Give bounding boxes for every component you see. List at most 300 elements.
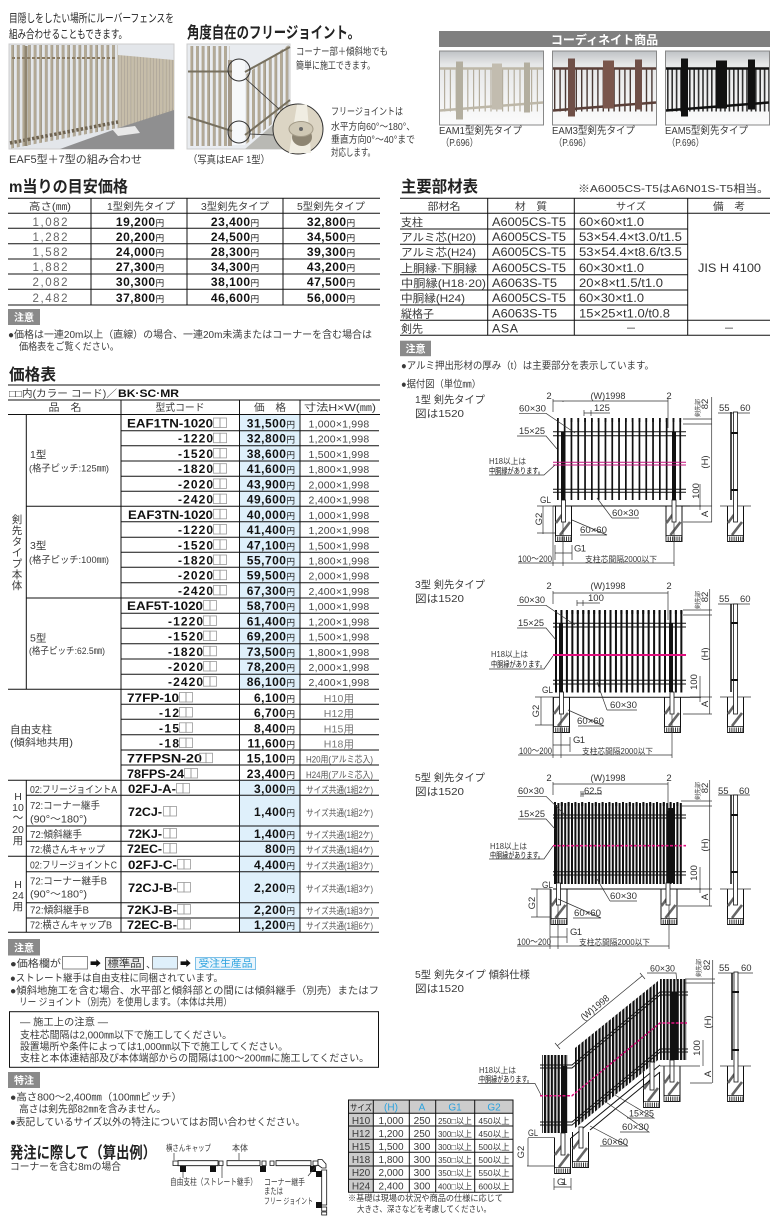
column: model codes	[127, 416, 226, 932]
table: foundation sizes: 2,000	[378, 1168, 404, 1179]
labels: type 5 dimensions: A	[700, 893, 711, 900]
labels: type 3 dimensions: G2	[531, 705, 542, 717]
table: materials: 中胴縁(H18·20)	[401, 276, 486, 290]
labels: type 1 dimensions: 2	[546, 391, 552, 402]
column: model codes: 72KJ-	[128, 827, 162, 841]
table: materials: －	[724, 323, 734, 335]
text: colour code: □□内(カラー コード)／	[9, 387, 117, 400]
table: price per metre	[8, 198, 380, 305]
labels: diagram: 自由支柱（ストレート継手）	[170, 1176, 257, 1187]
column: model codes: 78FPS-24	[127, 767, 184, 781]
labels: type 1 dimensions: 支柱芯間隔2000以下	[585, 554, 657, 564]
column: model codes: 77FP-10	[127, 691, 179, 705]
heading: louver fence combination: 目隠しをしたい場所にルーバーフェンスを	[9, 11, 174, 25]
column: dimensions: 1,800×1,998	[309, 647, 369, 659]
labels: type 1 dimensions: G1	[574, 544, 586, 554]
labels: sloped dimensions: 60	[741, 963, 752, 974]
column: model codes: -12	[159, 706, 179, 720]
labels: type 1 dimensions: 2	[666, 391, 672, 402]
label: type 3 title: 図は1520	[415, 593, 464, 605]
column: prices: 49,600円	[247, 493, 295, 507]
labels: sloped dimensions: A	[703, 1070, 714, 1077]
labels: type 1 dimensions	[489, 391, 751, 565]
column: prices: 6,700円	[254, 706, 295, 720]
label: H10-20: ～	[13, 812, 24, 824]
labels: type 3 dimensions	[491, 581, 751, 757]
labels: type 5 dimensions	[490, 773, 750, 948]
badge: special order	[8, 1072, 40, 1088]
table: price per metre: 1型剣先タイプ	[107, 200, 175, 213]
labels: sloped dimensions: GL	[528, 1128, 538, 1139]
table: foundation sizes: 300	[414, 1142, 431, 1153]
photo: free joint corner	[187, 44, 290, 149]
text: material equivalence note: ※A6005CS-T5はA6N01S-T5相当。	[578, 182, 769, 195]
labels: type 1 dimensions: 60×60	[580, 525, 607, 536]
labels: type 3 dimensions: 100	[689, 674, 700, 690]
labels: sloped dimensions: 55	[719, 963, 730, 974]
label: type 5: (格子ピッチ:62.5㎜)	[29, 645, 105, 657]
labels: sloped dimensions: 60×30	[650, 964, 675, 974]
column: model codes: 72CJ-	[128, 805, 162, 819]
table: foundation sizes	[348, 1100, 513, 1192]
table: price per metre: 1,882	[32, 262, 68, 274]
label: sword tip body: タ	[12, 536, 22, 548]
column: prices: 41,600円	[247, 462, 295, 476]
table: materials: A6005CS-T5	[492, 291, 566, 305]
badge: special order: 特注	[14, 1074, 34, 1087]
column: prices: 43,900円	[247, 477, 295, 491]
table: materials	[400, 198, 770, 336]
label: type 3 title: 3型 剣先タイプ	[415, 578, 485, 591]
legend: price column colours: 、	[146, 960, 156, 971]
table: foundation sizes: 400□以上	[438, 1182, 472, 1192]
labels: accessories: 72:傾斜継手	[30, 828, 82, 841]
labels: type 1 dimensions: 82	[700, 399, 711, 409]
table: foundation sizes: H15	[352, 1142, 371, 1153]
text: foundation note	[348, 1193, 503, 1214]
column: model codes: -2020	[178, 569, 213, 583]
column: model codes: -1220	[168, 614, 203, 628]
labels: type 3 dimensions: GL	[542, 685, 553, 696]
legend: price column colours: ➡	[180, 958, 191, 970]
column: prices: 38,600円	[247, 447, 295, 461]
labels: type 5 dimensions: (W)1998	[590, 773, 626, 784]
label: type 5 title: 5型 剣先タイプ	[415, 771, 485, 784]
table: price per metre: 1,082	[32, 217, 68, 229]
label: type 3: (格子ピッチ:100㎜)	[29, 554, 109, 566]
table: price per metre: 5型剣先タイプ	[297, 200, 365, 213]
column: prices: 86,100円	[247, 675, 295, 689]
column: dimensions: 1,500×1,998	[309, 449, 369, 461]
labels: type 3 dimensions: 2	[546, 581, 552, 592]
table: foundation sizes: G1	[448, 1102, 462, 1114]
column: prices: 32,800円	[247, 432, 295, 446]
table: price per metre: 高さ(㎜)	[29, 200, 71, 213]
side view: type 1	[718, 412, 751, 522]
legend: price column colours: 標準品	[108, 957, 142, 970]
table: foundation sizes: A	[419, 1102, 426, 1114]
heading: ordering example: 発注に際して（算出例）	[10, 1143, 156, 1162]
column: model codes: -1520	[178, 538, 213, 552]
labels: type 3 dimensions: A	[700, 700, 711, 707]
caption: EAM1: EAM1型剣先タイプ	[439, 124, 522, 137]
column: dimensions: 1,500×1,998	[309, 632, 369, 644]
column: dimensions: H15用	[324, 723, 354, 735]
labels: type 5 dimensions: 剣先部	[694, 782, 702, 800]
table: materials: 53×54.4×t8.6/t3.5	[579, 245, 682, 259]
table header	[48, 401, 376, 414]
column: dimensions: 2,400×1,998	[309, 586, 369, 598]
table: foundation sizes: 300	[414, 1168, 431, 1179]
labels: type 5 dimensions: 100	[689, 865, 700, 881]
labels: type 1 dimensions: H18以上は	[489, 457, 526, 466]
labels: sloped dimensions: G1	[557, 1177, 567, 1188]
table: foundation sizes: 450以上	[478, 1129, 510, 1139]
column: model codes: -1820	[178, 462, 213, 476]
column: model codes: EAF3TN-1020	[128, 508, 213, 522]
column: prices: 73,500円	[247, 645, 295, 659]
side view: type 5	[718, 795, 751, 905]
table: foundation sizes: (H)	[384, 1102, 398, 1114]
column: model codes: -1220	[178, 523, 213, 537]
labels: type 3 dimensions: 中胴縁があります。	[491, 659, 546, 669]
labels: type 1 dimensions: GL	[540, 495, 551, 506]
legend: price column colours: 受注生産品	[198, 957, 252, 970]
text: price note	[8, 328, 372, 353]
table: price per metre: 24,000円	[116, 245, 164, 259]
labels: type 5 dimensions: 60×60	[574, 908, 601, 919]
column: dimensions: 1,000×1,998	[309, 418, 369, 430]
labels: type 5 dimensions: 2	[546, 773, 552, 784]
labels: type 3 dimensions: 60×30	[610, 700, 637, 711]
caption: EAF5 and 7: EAF5型＋7型の組み合わせ	[9, 152, 142, 166]
column: model codes: -2420	[178, 493, 213, 507]
label: free post: 自由支柱	[10, 723, 52, 736]
column: prices: 11,600円	[247, 737, 295, 751]
table: materials: アルミ芯(H24)	[401, 246, 476, 259]
table: foundation sizes: 300	[414, 1182, 431, 1192]
column: prices	[247, 416, 295, 932]
column: model codes: 02FJ-C-	[128, 858, 177, 872]
labels: type 5 dimensions: 60	[739, 786, 750, 797]
photo: EAF5 and 7 type fence	[9, 44, 174, 149]
table: price per metre: 2,082	[32, 277, 68, 289]
legend: price column colours	[10, 956, 256, 971]
label: sloped title	[415, 968, 530, 995]
labels: type 3 dimensions: 100～200	[519, 746, 552, 757]
table: materials: 材 質	[515, 200, 547, 213]
column: model codes: 72EC-	[127, 842, 162, 856]
column: model codes: -2020	[168, 660, 203, 674]
table: materials: A6005CS-T5	[492, 230, 566, 244]
table: foundation sizes: 600以上	[478, 1182, 510, 1192]
column: prices: 58,700円	[247, 599, 295, 613]
table: materials: －	[626, 323, 636, 335]
column: model codes: EAF1TN-1020	[127, 416, 213, 430]
labels: type 5 dimensions: G1	[570, 927, 582, 938]
table: price per metre: 34,500円	[307, 230, 355, 244]
labels: sloped dimensions: (W)1998	[579, 993, 612, 1023]
table: materials: 剣先	[401, 322, 423, 336]
photo: EAM3	[552, 51, 656, 125]
column: prices: 69,200円	[247, 630, 295, 644]
text: corner note: コーナー部＋傾斜地でも	[296, 45, 388, 58]
column: dimensions: H12用	[324, 708, 354, 720]
heading bar: coordinate products: コーディネイト商品	[551, 32, 658, 47]
column: model codes: -1520	[178, 447, 213, 461]
labels: type 1 dimensions: 60	[740, 403, 751, 414]
table: foundation sizes: 250	[414, 1129, 431, 1140]
text: notes: ●傾斜地施工を含む場合、水平部と傾斜部との間には傾斜継手（別売）またはフ	[10, 984, 379, 997]
labels: type 1 dimensions: 15×25	[519, 426, 545, 437]
column: dimensions: 1,800×1,998	[309, 556, 369, 568]
labels: type 1 dimensions: 剣先部	[694, 399, 702, 417]
labels: sloped dimensions: 82	[702, 960, 713, 970]
badge: notice right: 注意	[406, 342, 426, 356]
labels: type 5 dimensions: H18以上は	[490, 842, 527, 851]
table: materials: A6005CS-T5	[492, 261, 566, 275]
table: price per metre: 1,282	[32, 232, 68, 244]
labels: sloped dimensions: 中胴縁があります。	[479, 1074, 533, 1084]
column: dimensions: 1,000×1,998	[309, 601, 369, 613]
table: foundation sizes: 350□以上	[438, 1155, 472, 1165]
labels: accessories	[30, 785, 117, 932]
labels: type 5 dimensions: 2	[666, 773, 672, 784]
label: type 5 title: 図は1520	[415, 786, 464, 798]
labels: type 1 dimensions: 125	[594, 403, 610, 414]
label: sword tip body: 先	[12, 525, 22, 537]
caption: EAM1: （P.696）	[441, 137, 478, 149]
table: price per metre: 20,200円	[116, 230, 164, 244]
labels: diagram	[166, 1143, 313, 1206]
heading: louver fence combination: 組み合わせることもできます。	[9, 28, 127, 41]
table: materials: 20×8×t1.5/t1.0	[579, 276, 663, 290]
column: prices: 3,000円	[254, 782, 295, 796]
column: prices: 6,100円	[254, 691, 295, 705]
column: model codes: 72CJ-B-	[128, 881, 177, 895]
table: materials: ASA	[492, 322, 519, 336]
label: H10-20: 用	[13, 835, 23, 847]
labels: accessories: (90°～180°)	[30, 890, 87, 901]
table: foundation sizes: H24	[352, 1182, 371, 1192]
table: foundation sizes: H10	[352, 1116, 371, 1127]
drawing: type 1 fence	[415, 391, 751, 566]
table: foundation sizes: 300□以上	[438, 1142, 472, 1152]
caption: EAM5: （P.696）	[667, 137, 704, 149]
column: model codes: -2020	[178, 477, 213, 491]
side view: type 3	[718, 604, 751, 714]
labels: type 3 dimensions: 60	[740, 594, 751, 605]
table: price per metre: 34,300円	[211, 260, 259, 274]
caption: EAM3: （P.696）	[554, 137, 591, 149]
table: price per metre: 39,300円	[307, 245, 355, 259]
table: foundation sizes: 350□以上	[438, 1168, 472, 1178]
column: dimensions: 2,000×1,998	[309, 479, 369, 491]
table: materials: JIS H 4100	[698, 261, 761, 275]
table: materials: 60×30×t1.0	[579, 261, 644, 275]
labels: type 5 dimensions: G2	[527, 897, 538, 909]
column: dimensions: 1,200×1,998	[309, 525, 369, 537]
labels: type 1 dimensions: 55	[719, 403, 730, 414]
photo: EAM1	[440, 51, 544, 125]
table: materials: 縦格子	[401, 306, 434, 320]
callout: construction notes: ― 施工上の注意 ―	[20, 1016, 108, 1029]
caption: EAM3	[552, 124, 635, 149]
label: sword tip body: プ	[12, 558, 23, 570]
table: foundation sizes: サイズ	[350, 1102, 372, 1112]
text: notes: ●ストレート継手は自由支柱に同梱されています。	[10, 972, 223, 984]
side view: sloped	[718, 972, 753, 1082]
caption: EAM5	[665, 124, 748, 149]
label: type 5 title	[415, 771, 485, 798]
table header: 寸法H×W(㎜)	[304, 401, 376, 414]
text: special order notes: ●表記しているサイズ以外の特注についてはお問い合わせください。	[10, 1116, 305, 1129]
labels: type 5 dimensions: 82	[700, 783, 711, 793]
labels: type 3 dimensions: 15×25	[518, 618, 544, 629]
drawing: type 5 fence	[415, 771, 751, 949]
text: special order notes: ●高さ800～2,400㎜（100㎜ピッチ）	[10, 1091, 182, 1104]
labels: type 1 dimensions: 60×30	[519, 404, 546, 414]
text: free joint description	[331, 106, 415, 159]
column: model codes: 02FJ-A-	[128, 782, 176, 796]
heading: louver fence combination	[9, 11, 174, 41]
table: foundation sizes: 2,400	[378, 1182, 404, 1192]
column: prices: 41,400円	[247, 523, 295, 537]
column: dimensions: サイズ共通(1組3ケ)	[306, 905, 373, 916]
text: free joint description: 水平方向60°～180°、	[331, 120, 415, 133]
table: foundation sizes: 1,500	[378, 1142, 404, 1153]
table: foundation sizes: 500以上	[478, 1142, 510, 1152]
table: materials: A6063S-T5	[492, 306, 557, 320]
icon: joint magnifier circles	[228, 59, 279, 143]
table: materials: 上胴縁·下胴縁	[401, 261, 477, 275]
table: foundation sizes: 300□以上	[438, 1129, 472, 1139]
text: free joint description: フリージョイントは	[331, 106, 403, 118]
callout: construction notes: 設置場所や条件によっては1,000㎜以下で施工してください。	[20, 1040, 288, 1053]
column: prices: 15,100円	[247, 752, 295, 766]
table: foundation sizes: 550以上	[478, 1168, 510, 1178]
table header: 型式コード	[156, 401, 204, 414]
column: dimensions: サイズ共通(1組6ケ)	[306, 920, 373, 931]
table: foundation sizes: 500以上	[478, 1155, 510, 1165]
text: colour code: BK·SC·MR	[118, 388, 179, 400]
heading: ordering example	[10, 1143, 156, 1173]
labels: accessories: 72:コーナー継手B	[30, 874, 107, 887]
column: dimensions: H24用(アルミ芯入)	[306, 770, 373, 780]
labels: type 1 dimensions: 100	[691, 483, 702, 499]
table: price per metre: 1,582	[32, 247, 68, 259]
column: prices: 2,200円	[254, 881, 295, 895]
labels: type 3 dimensions: H18以上は	[491, 650, 528, 659]
labels: sloped dimensions: 60×30	[622, 1122, 649, 1133]
label: H10-20: 10	[12, 802, 24, 814]
badge: notice 2: 注意	[14, 942, 34, 954]
label: type 3	[29, 539, 109, 566]
label: type 1: (格子ピッチ:125㎜)	[29, 463, 109, 475]
text: special order notes: 高さは剣先部82㎜を含みません。	[19, 1102, 166, 1115]
labels: sloped dimensions: 剣先部	[695, 959, 703, 977]
column: dimensions: サイズ共通(1組2ケ)	[306, 807, 373, 818]
label: type 1 title: 図は1520	[415, 408, 464, 420]
pickets: sloped fence body	[542, 979, 687, 1133]
caption: EAM3: EAM3型剣先タイプ	[552, 124, 635, 137]
caption: EAM1	[439, 124, 522, 149]
label: free post	[10, 723, 73, 749]
table: price per metre: 32,800円	[307, 215, 355, 229]
table: foundation sizes: 1,000	[378, 1116, 404, 1127]
column: dimensions: 2,000×1,998	[309, 571, 369, 583]
label: H24: H	[14, 879, 22, 891]
text: notes	[10, 972, 379, 1009]
text: thickness note: ●アルミ押出形材の厚み（t）は主要部分を表示しています。	[401, 359, 654, 372]
table: materials: 60×60×t1.0	[579, 215, 644, 229]
table: foundation sizes: G2	[487, 1102, 501, 1114]
column: model codes: 72EC-B-	[127, 918, 177, 932]
table: price per metre: 38,100円	[211, 275, 259, 289]
column: model codes: -18	[159, 737, 179, 751]
heading: free joint: 角度自在のフリージョイント。	[187, 23, 360, 42]
table: price per metre: 2,482	[32, 293, 68, 305]
legend: price column colours: ➡	[90, 958, 101, 970]
column: dimensions: H20用(アルミ芯入)	[306, 755, 373, 765]
labels: type 5 dimensions: 支柱芯間隔2000以下	[579, 937, 650, 947]
label: sloped title: 図は1520	[415, 983, 464, 995]
text: notes: リー ジョイント（別売）を使用します。（本体は共用）	[19, 996, 232, 1009]
label: type 5	[29, 632, 105, 657]
caption: photo EAF1: （写真はEAF 1型）	[188, 153, 270, 166]
labels: accessories: 72:傾斜継手B	[30, 904, 89, 916]
labels: type 1 dimensions: 中胴縁があります。	[489, 466, 544, 476]
table: price per metre: 24,500円	[211, 230, 259, 244]
table: price per metre: 27,300円	[116, 260, 164, 274]
column: dimensions: 2,400×1,998	[309, 677, 369, 689]
label: type 5: 5型	[30, 632, 46, 645]
table: price list	[8, 385, 380, 932]
table: price per metre: 56,000円	[307, 291, 355, 305]
table: price per metre: 43,200円	[307, 260, 355, 274]
table: materials: A6063S-T5	[492, 276, 557, 290]
table: foundation sizes: 300	[414, 1155, 431, 1166]
column: dimensions: H18用	[324, 739, 354, 751]
icon: free joint close-up	[273, 104, 323, 154]
column: dimensions: 1,200×1,998	[309, 434, 369, 446]
table: materials: 53×54.4×t3.0/t1.5	[579, 230, 682, 244]
labels: sloped dimensions	[479, 959, 752, 1188]
text: foundation note: 大きさ、深さなどを考慮してください。	[357, 1204, 491, 1214]
table: price per metre: 30,300円	[116, 275, 164, 289]
label: sword tip body: 体	[12, 580, 23, 592]
column: model codes: -2420	[178, 584, 213, 598]
labels: type 5 dimensions: 中胴縁があります。	[490, 850, 544, 860]
labels: sloped dimensions: 100	[692, 1040, 703, 1056]
column: prices: 4,400円	[254, 858, 295, 872]
labels: type 5 dimensions: 60×30	[610, 891, 637, 902]
labels: type 3 dimensions: 82	[700, 592, 711, 602]
labels: accessories: 02:フリージョイントA	[30, 785, 117, 796]
text: free joint description: 垂直方向0°～40°まで	[331, 133, 415, 146]
label: H24: 用	[13, 901, 23, 913]
column: prices: 1,400円	[254, 805, 295, 819]
column: prices: 1,200円	[254, 918, 295, 932]
table: materials: 60×30×t1.0	[579, 291, 644, 305]
labels: type 1 dimensions: 60×30	[612, 508, 639, 519]
column: prices: 2,200円	[254, 903, 295, 917]
column: prices: 40,000円	[247, 508, 295, 522]
column: prices: 78,200円	[247, 660, 295, 674]
labels: type 1 dimensions: A	[700, 510, 711, 517]
table: foundation sizes: 1,800	[378, 1155, 404, 1166]
labels: type 1 dimensions: G2	[534, 513, 545, 525]
